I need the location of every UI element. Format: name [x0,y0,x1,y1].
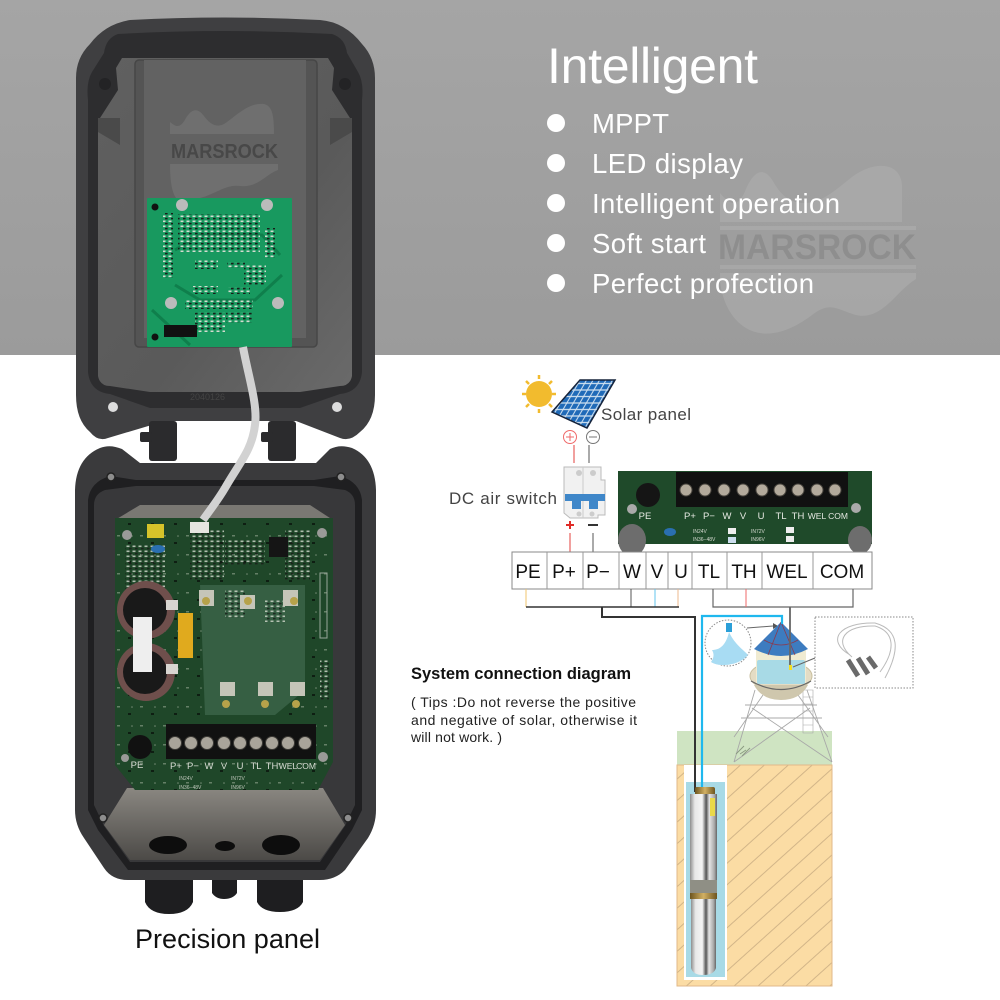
photo: terminal strip close-up: TL [775,511,787,522]
well water [686,782,725,977]
negative terminal symbol [586,430,600,463]
terminal labels on board: TH [266,761,278,772]
sensor cable [789,607,792,670]
terminal labels on board: WEL [279,761,297,771]
plus sign and wire [566,521,574,552]
terminal labels on board: TL [250,761,262,772]
cable entry holes [149,835,300,855]
terminal label table: PE [515,562,541,583]
small yellow inductor [147,524,164,538]
terminal label table: P+ [552,562,576,583]
screws on base [99,473,352,822]
feature list [547,108,840,299]
photo: terminal strip close-up: IN24V [693,529,708,535]
lid screw posts [98,78,352,412]
photo: terminal strip close-up [618,471,872,556]
photo: terminal strip close-up: TH [792,511,804,522]
blue capacitor [151,545,165,553]
tips text: and negative of solar, otherwise it [411,712,637,728]
terminal labels on board: U [237,761,244,772]
photo: terminal strip close-up: IN96V [751,537,766,543]
photo: terminal strip close-up: WEL [808,511,826,521]
feature list: LED display [592,148,743,179]
terminal labels on board: V [221,761,228,772]
terminal labels on board: P+ [170,761,182,772]
watermark: MARSROCK logo: MARSROCK [718,228,916,267]
ground strip [677,731,832,765]
icon: DC air switch [564,467,605,518]
submersible pump [690,787,717,975]
heading: Intelligent: Intelligent [547,38,758,94]
metal tray bottom [104,788,345,860]
small control board [147,198,292,347]
base inner cavity [94,486,355,862]
pump power cable [602,607,695,792]
heading: System connection diagram: System connection diagram [411,664,631,683]
terminal labels on board: P− [187,761,199,772]
terminal labels on board: W [205,761,214,772]
lid logo MARSROCK: MARSROCK [171,141,278,163]
terminal label table: W [623,562,641,583]
voltage labels on board [179,776,246,791]
photo: terminal strip close-up: IN36−48V [693,537,716,543]
terminal label table [512,552,872,589]
terminal labels on board: PE [131,760,143,771]
tips text: ( Tips :Do not reverse the positive [411,694,636,710]
photo: terminal strip close-up: U [758,511,765,522]
water pipe [702,616,782,788]
ribbon cable [203,347,256,520]
photo: terminal strip close-up: P− [703,511,715,522]
photo: terminal strip close-up: IN72V [751,529,766,535]
float switch inset [815,617,913,688]
power transistors [199,590,305,708]
voltage labels on board: IN24V [179,776,194,782]
positive terminal symbol [564,430,576,463]
photo: terminal strip close-up: V [740,511,747,522]
sprinkler inset [705,620,778,666]
wiring: sensor group [713,589,853,607]
cable glands [145,880,303,914]
photo: terminal strip close-up: COM [828,511,848,521]
minus sign and wire [588,524,598,552]
terminal label table: TL [698,562,720,583]
tips text: will not work. ) [410,729,502,745]
voltage labels on board: IN96V [231,785,246,791]
photo: terminal strip close-up: PE [639,511,651,522]
terminal labels on board [131,760,316,772]
icon: solar panel [552,380,615,428]
photo: open enclosure lid [76,18,375,461]
terminal label table: COM [820,562,864,583]
base recessed gasket channel [88,476,362,870]
electrolytic capacitors [117,581,178,701]
hinges [140,421,296,461]
label: DC air switch: DC air switch [449,489,557,508]
buzzer [128,735,152,759]
feature list: Soft start [592,228,706,259]
inner raised plate [135,60,317,347]
terminal block [166,724,316,759]
watermark: MARSROCK logo [718,166,916,334]
icon: sun [522,375,556,413]
lid floor [98,58,352,392]
terminal label table: P− [586,562,610,583]
label: Solar panel: Solar panel [601,405,691,424]
caption: Precision panel: Precision panel [135,924,320,954]
photo: terminal strip close-up: P+ [684,511,696,522]
feature list: Intelligent operation [592,188,840,219]
soil cross section [677,765,832,986]
tips text [410,694,637,745]
base outer shell [75,446,376,880]
lid logo MARSROCK [170,104,278,198]
terminal label table: WEL [766,562,808,583]
wiring: pump group [526,589,679,607]
terminal label table: U [674,562,688,583]
lid outer shell [76,18,375,439]
grey header banner [0,0,1000,355]
black chip [269,537,288,557]
voltage labels on board: IN36−48V [179,785,202,791]
yellow film capacitor [178,613,193,658]
feature list: MPPT [592,108,669,139]
lid date stamp: 2040126 [190,392,225,402]
terminal labels on board: COM [296,761,316,771]
well shaft [684,765,727,980]
metal tray top [115,505,333,520]
terminal label table: TH [731,562,757,583]
photo: terminal strip close-up: W [723,511,732,522]
main circuit board [115,518,333,790]
feature list: Perfect profection [592,268,814,299]
water tower [734,622,832,762]
photo: open enclosure base [75,446,376,914]
voltage labels on board: IN72V [231,776,246,782]
white connector [190,522,209,533]
terminal label table: V [651,562,664,583]
lid recessed channel [88,31,362,408]
